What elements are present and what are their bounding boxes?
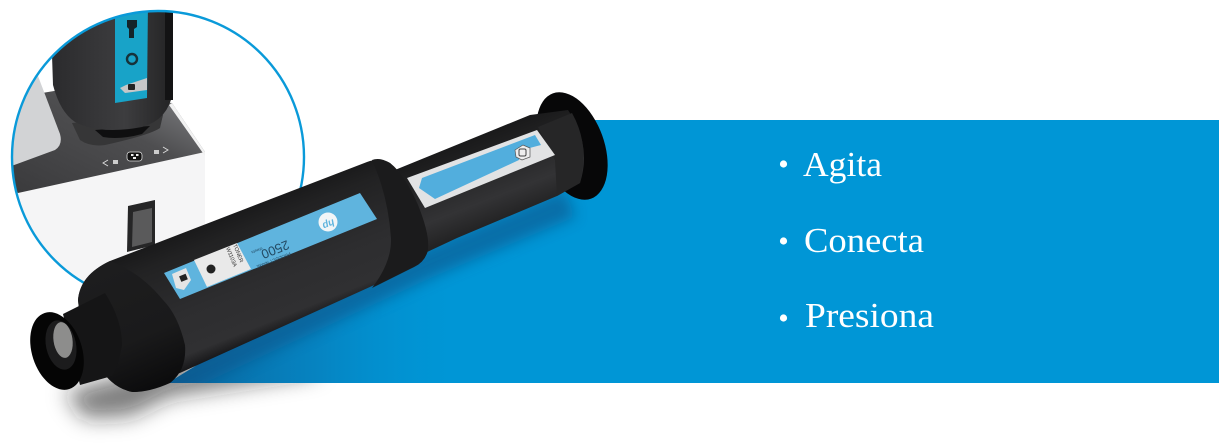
panel: blue background (150, 120, 1219, 392)
upper cartridge (52, 12, 171, 130)
hp logo: hp (321, 216, 336, 231)
main body (78, 160, 428, 392)
main label (164, 193, 377, 299)
label text: W1103A (224, 247, 238, 268)
rear tube (390, 110, 584, 253)
ground shadow (65, 352, 320, 418)
nose neck (63, 293, 122, 385)
bullet: Agita: Agita (803, 145, 882, 184)
circle outline (12, 11, 304, 303)
tube label (407, 130, 555, 208)
label text (224, 237, 291, 269)
upper cartridge blue label (115, 12, 148, 103)
label text: 2500 (259, 237, 291, 262)
end collar left (78, 261, 185, 392)
label text: sheets (251, 246, 263, 255)
rear flange (523, 82, 621, 210)
lock icon (128, 84, 135, 90)
deck indicators (127, 152, 142, 161)
recycle icon (127, 54, 137, 64)
bullet list (780, 145, 934, 335)
black dot (206, 264, 216, 274)
label text: PRODUCT NAME (256, 251, 291, 269)
printer grey tray (13, 76, 61, 166)
cartridge socket (72, 115, 163, 145)
printer window slot (127, 200, 155, 252)
toner cartridge (21, 82, 621, 397)
label text: TONER (231, 244, 244, 264)
label grey section (194, 243, 251, 287)
lock icon (172, 268, 191, 290)
end collar right (372, 159, 428, 288)
bullet: Presiona: Presiona (805, 296, 934, 335)
printer dark deck (0, 90, 205, 193)
person icon (127, 20, 137, 38)
hp logo (318, 212, 338, 232)
bullet: Conecta: Conecta (804, 221, 924, 260)
tube label icon (515, 145, 530, 160)
nose cap (21, 305, 93, 397)
printer white body (18, 153, 205, 281)
inset circle: printer detail (10, 10, 306, 284)
